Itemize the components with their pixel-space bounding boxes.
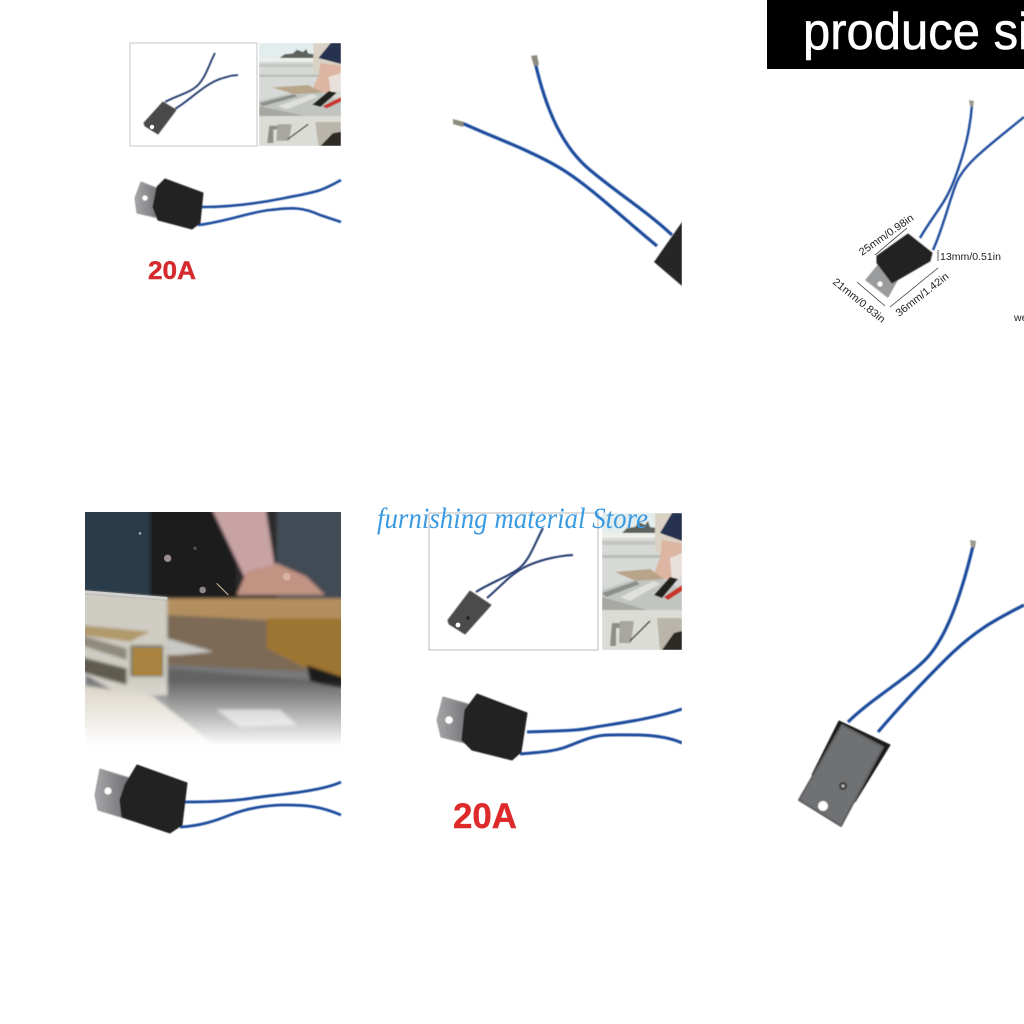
dimension labels: 21mm/0.83in <box>830 276 888 326</box>
panel: top-left product thumbnail <box>130 43 341 285</box>
label: 20A: 20A <box>453 797 517 836</box>
panel: top-middle wires close-up <box>453 55 682 286</box>
switch with blue wires <box>437 694 682 760</box>
label: 20A: 20A <box>148 257 196 285</box>
photo: table saw <box>259 43 341 146</box>
panel: top-right product size <box>767 0 1024 326</box>
store watermark: furnishing material Store <box>377 502 648 535</box>
panel: bottom-right switch back view <box>799 540 1024 826</box>
blue wires <box>848 546 1024 732</box>
photo: table saw <box>602 513 682 650</box>
panel: bottom-middle product thumbnail <box>377 502 682 836</box>
dimension labels: 13mm/0.51in <box>940 251 1001 263</box>
switch body <box>799 721 890 826</box>
wire tip <box>970 540 976 548</box>
image frame with small switch <box>130 43 257 146</box>
dimension labels <box>830 212 1024 326</box>
panel: bottom-left woodworking photo and switch <box>80 505 347 833</box>
image frame with small switch <box>429 513 598 650</box>
dimension labels: 25mm/0.98in <box>857 212 916 258</box>
switch with blue wires <box>95 765 341 833</box>
dimension lines <box>857 228 938 307</box>
photo: wood cutting <box>85 512 341 742</box>
dimension labels: 36mm/1.42in <box>893 270 951 319</box>
switch diagram <box>865 100 1024 298</box>
switch with blue wires <box>135 179 341 229</box>
